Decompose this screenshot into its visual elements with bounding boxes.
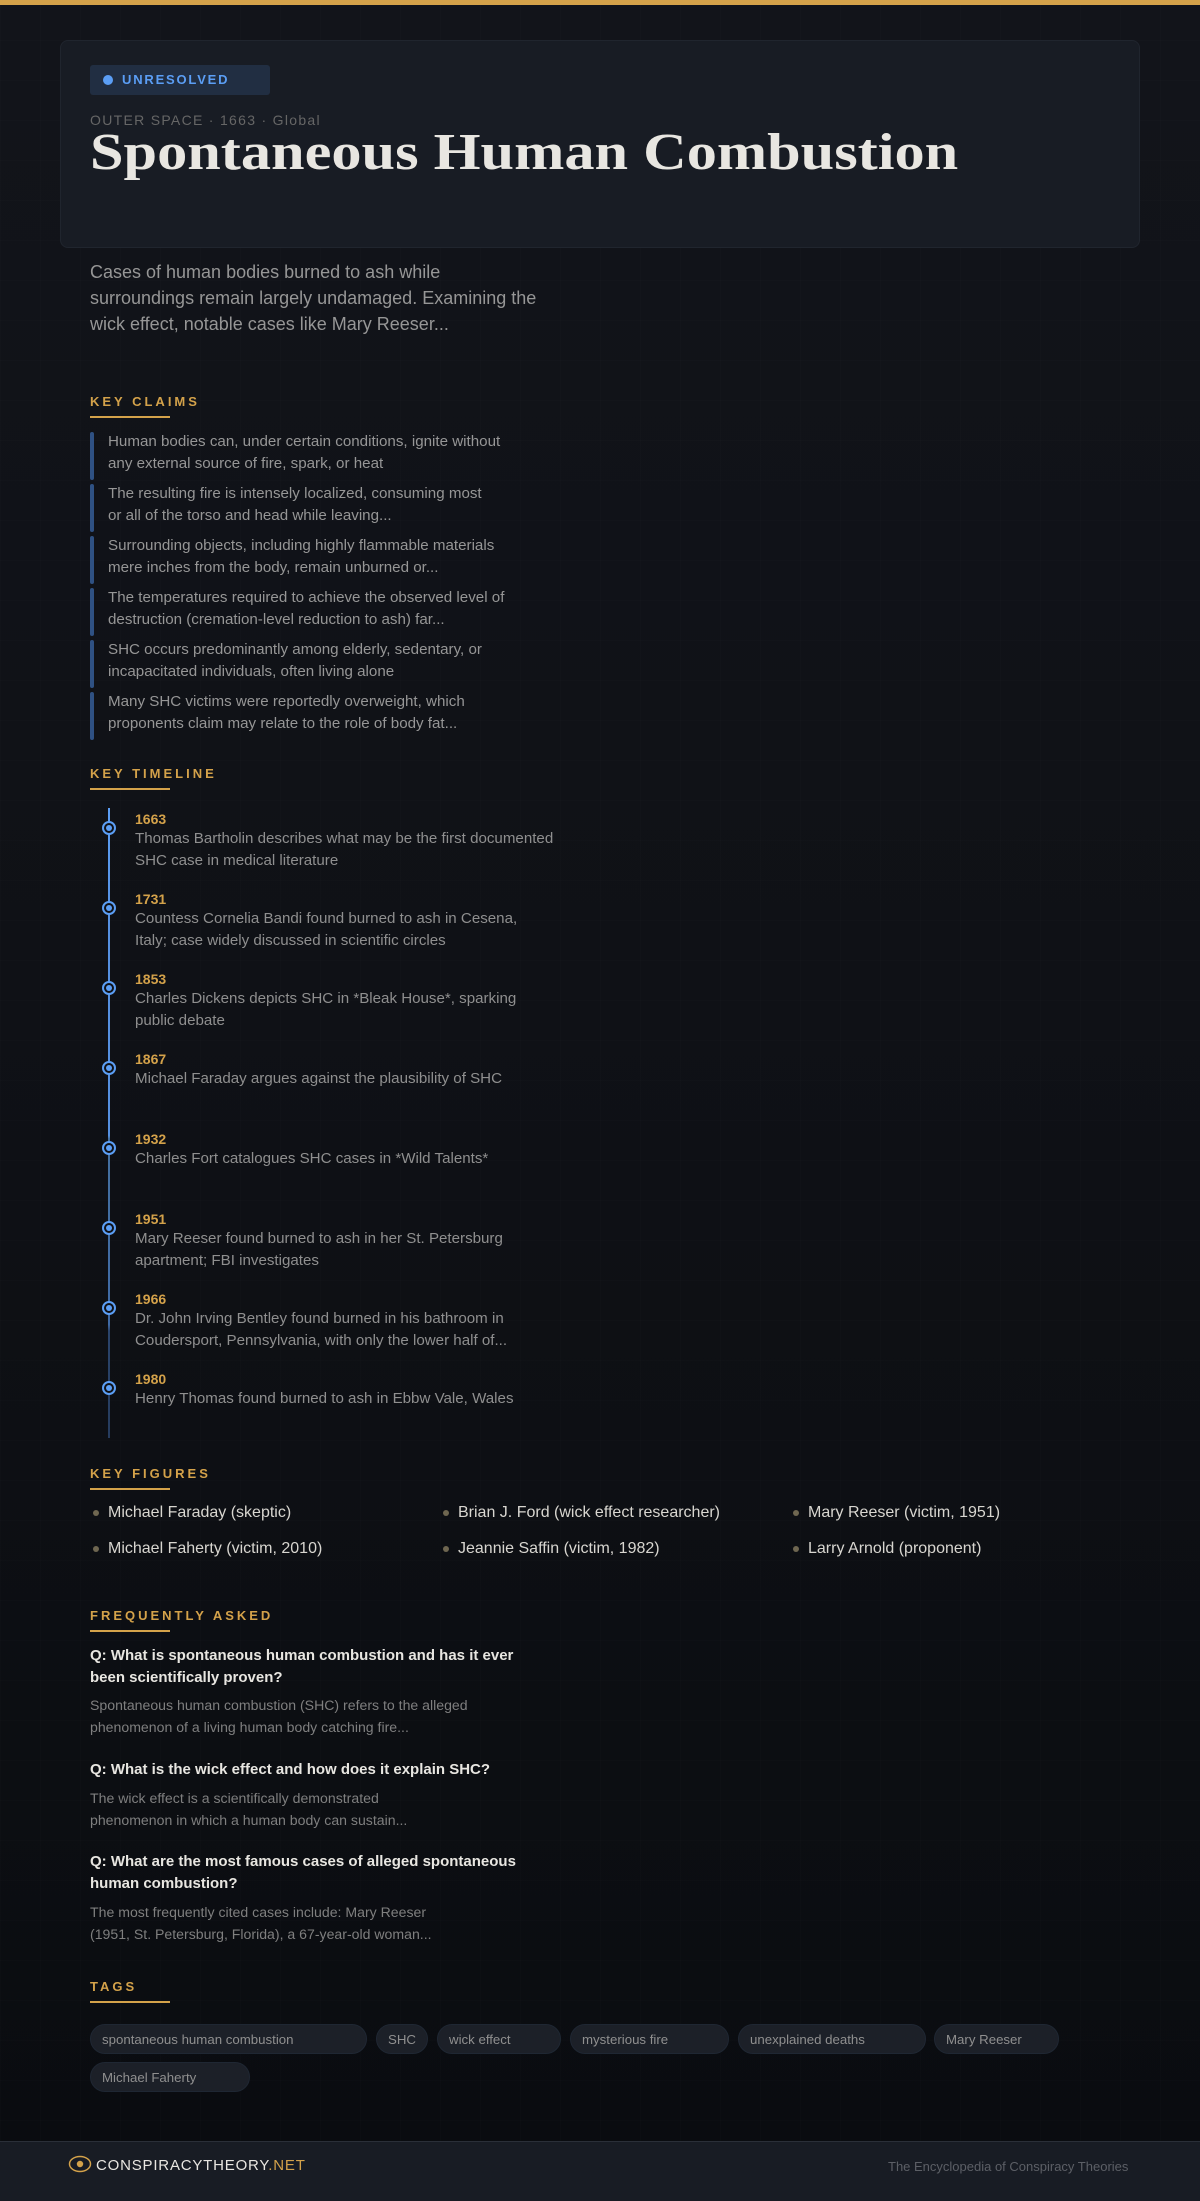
FAQ question 3: human combustion?: [90, 1875, 238, 1892]
tag: [437, 2024, 561, 2054]
description text: wick effect, notable cases like Mary Reeser...: [90, 314, 449, 334]
description text: [90, 262, 536, 334]
FAQ question 1: Q: What is spontaneous human combustion and has it ever: [90, 1647, 513, 1664]
footer: [0, 2141, 1200, 2201]
tag: mysterious fire: [582, 2032, 668, 2047]
tag: spontaneous human combustion: [102, 2032, 294, 2047]
event 1980: 1980: [135, 1371, 166, 1387]
icon: eye logo: [68, 2156, 92, 2172]
tag: Mary Reeser: [946, 2032, 1022, 2047]
event 1867: 1867: [135, 1051, 166, 1067]
logo wordmark: CONSPIRACYTHEORY.NET: [96, 2157, 306, 2174]
event 1932: 1932: [135, 1131, 166, 1147]
claim 6: Many SHC victims were reportedly overweight, which: [108, 693, 465, 710]
event 1853: public debate: [135, 1012, 225, 1029]
event 1966: 1966: [135, 1291, 166, 1307]
figure: Michael Faherty: Michael Faherty (victim, 2010): [108, 1540, 322, 1557]
event 1731: Italy; case widely discussed in scientific circles: [135, 932, 446, 949]
badge label: UNRESOLVED: [122, 72, 229, 87]
event 1951: Mary Reeser found burned to ash in her St. Petersburg: [135, 1230, 503, 1247]
FAQ answer 2: [90, 1790, 407, 1828]
figure: Jeannie Saffin: Jeannie Saffin (victim, 1982): [458, 1540, 660, 1557]
claim 2: The resulting fire is intensely localized, consuming most: [108, 485, 482, 502]
claim 1: any external source of fire, spark, or heat: [108, 455, 383, 472]
claim 3: Surrounding objects, including highly flammable materials: [108, 537, 494, 554]
panel: FAQ: [90, 1647, 516, 1942]
title: Spontaneous Human Combustion: [90, 124, 958, 181]
event 1951: apartment; FBI investigates: [135, 1252, 319, 1269]
FAQ question 2: Q: What is the wick effect and how does it explain SHC?: [90, 1761, 490, 1778]
claim 1: [90, 432, 500, 480]
panel: hero header: [60, 40, 1140, 248]
tag: unexplained deaths: [750, 2032, 865, 2047]
FAQ answer 1: phenomenon of a living human body catching fire...: [90, 1719, 409, 1735]
FAQ answer 1: [90, 1697, 468, 1735]
event 1853: [102, 971, 516, 1029]
event 1951: [102, 1211, 503, 1269]
FAQ answer 3: [90, 1904, 432, 1942]
claim 3: mere inches from the body, remain unburned or...: [108, 559, 438, 576]
figure: Mary Reeser: Mary Reeser (victim, 1951): [808, 1504, 1000, 1521]
tag: SHC: [388, 2032, 416, 2047]
panel: tags: [90, 2024, 1059, 2092]
claim 5: SHC occurs predominantly among elderly, sedentary, or: [108, 641, 482, 658]
FAQ answer 2: phenomenon in which a human body can sustain...: [90, 1812, 407, 1828]
chart: timeline: [102, 808, 553, 1438]
tag: [90, 2024, 367, 2054]
heading: key claims: KEY CLAIMS: [90, 394, 200, 409]
footer tagline: The Encyclopedia of Conspiracy Theories: [888, 2159, 1128, 2174]
FAQ answer 3: The most frequently cited cases include: Mary Reeser: [90, 1904, 426, 1920]
figure: Brian J. Ford: Brian J. Ford (wick effect researcher): [458, 1504, 720, 1521]
claim 5: [90, 640, 482, 688]
event 1966: Dr. John Irving Bentley found burned in his bathroom in: [135, 1310, 504, 1327]
event 1951: 1951: [135, 1211, 166, 1227]
heading: frequently asked: FREQUENTLY ASKED: [90, 1608, 273, 1623]
claim 5: incapacitated individuals, often living alone: [108, 663, 394, 680]
heading: key timeline: KEY TIMELINE: [90, 766, 217, 781]
event 1932: Charles Fort catalogues SHC cases in *Wild Talents*: [135, 1150, 488, 1167]
event 1867: [102, 1051, 502, 1087]
tag: [570, 2024, 729, 2054]
event 1731: 1731: [135, 891, 166, 907]
event 1853: 1853: [135, 971, 166, 987]
event 1731: [102, 891, 517, 949]
status badge: unresolved: [90, 65, 270, 95]
FAQ question 3: Q: What are the most famous cases of alleged spontaneous: [90, 1853, 516, 1870]
top accent bar: [0, 0, 1200, 5]
event 1966: [102, 1291, 507, 1349]
panel: key claims list: [90, 432, 504, 740]
tag: [738, 2024, 926, 2054]
event 1966: Coudersport, Pennsylvania, with only the lower half of...: [135, 1332, 507, 1349]
FAQ answer 3: (1951, St. Petersburg, Florida), a 67-year-old woman...: [90, 1926, 432, 1942]
panel: key figures list: [93, 1504, 1000, 1557]
event 1663: SHC case in medical literature: [135, 852, 338, 869]
event 1731: Countess Cornelia Bandi found burned to ash in Cesena,: [135, 910, 517, 927]
claim 1: Human bodies can, under certain conditions, ignite without: [108, 433, 500, 450]
FAQ question 1: [90, 1647, 514, 1686]
timeline axis line: [108, 808, 110, 1438]
claim 4: [90, 588, 504, 636]
tag: wick effect: [449, 2032, 511, 2047]
figure: Larry Arnold: Larry Arnold (proponent): [808, 1540, 981, 1557]
claim 2: [90, 484, 482, 532]
event 1663: Thomas Bartholin describes what may be the first documented: [135, 830, 553, 847]
claim 2: or all of the torso and head while leaving...: [108, 507, 392, 524]
event 1663: [102, 811, 553, 869]
FAQ question 3: [90, 1853, 516, 1892]
event 1663: 1663: [135, 811, 166, 827]
claim 3: [90, 536, 494, 584]
claim 4: destruction (cremation-level reduction to ash) far...: [108, 611, 445, 628]
meta line: OUTER SPACE · 1663 · Global: [90, 112, 321, 128]
event 1867: Michael Faraday argues against the plausibility of SHC: [135, 1070, 502, 1087]
tag: [90, 2062, 250, 2092]
claim 6: proponents claim may relate to the role of body fat...: [108, 715, 457, 732]
description text: Cases of human bodies burned to ash while: [90, 262, 440, 282]
description text: surroundings remain largely undamaged. Examining the: [90, 288, 536, 308]
FAQ question 1: been scientifically proven?: [90, 1669, 283, 1686]
FAQ answer 2: The wick effect is a scientifically demonstrated: [90, 1790, 379, 1806]
event 1853: Charles Dickens depicts SHC in *Bleak House*, sparking: [135, 990, 516, 1007]
tag: [934, 2024, 1059, 2054]
tag: Michael Faherty: [102, 2070, 196, 2085]
tag: [376, 2024, 428, 2054]
FAQ answer 1: Spontaneous human combustion (SHC) refers to the alleged: [90, 1697, 468, 1713]
heading: key figures: KEY FIGURES: [90, 1466, 211, 1481]
claim 6: [90, 692, 465, 740]
claim 4: The temperatures required to achieve the observed level of: [108, 589, 504, 606]
event 1932: [102, 1131, 488, 1167]
event 1980: Henry Thomas found burned to ash in Ebbw Vale, Wales: [135, 1390, 514, 1407]
event 1980: [102, 1371, 514, 1407]
figure: Michael Faraday: Michael Faraday (skeptic): [108, 1504, 291, 1521]
icon: status dot: [103, 75, 113, 85]
heading: tags: TAGS: [90, 1979, 137, 1994]
